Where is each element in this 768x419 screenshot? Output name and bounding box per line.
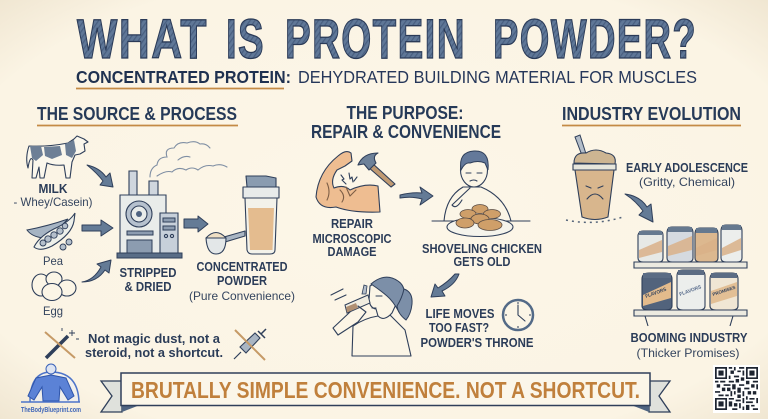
icon: pea pod (27, 213, 75, 250)
label: early adolescence (626, 161, 748, 189)
label: stripped and dried (120, 266, 176, 294)
label: pea: Pea (43, 254, 63, 268)
icon: shaker bottle (243, 176, 279, 254)
logo: the body blueprint (21, 364, 81, 414)
label: repair microscopic damage: MICROSCOPIC (312, 232, 392, 246)
heading: the purpose (311, 103, 501, 142)
icon: man eating chicken (432, 151, 530, 236)
heading: industry evolution: INDUSTRY EVOLUTION (562, 104, 741, 124)
icon: hammer (358, 153, 395, 187)
icon: crossed-out magic wand (45, 328, 79, 358)
label: milk: - Whey/Casein) (14, 195, 93, 209)
title: PROTEIN (285, 7, 466, 70)
panel: industry evolution (562, 104, 748, 360)
label: shoveling chicken gets old: SHOVELING CHICKEN (422, 242, 542, 256)
title (77, 7, 697, 70)
panel: the source and process (14, 104, 295, 360)
arrow: repair to chicken (400, 187, 433, 205)
heading: the purpose: REPAIR & CONVENIENCE (311, 122, 501, 142)
label: shoveling chicken gets old (422, 242, 542, 269)
subtitle (76, 67, 697, 88)
bottom shelf jars (642, 270, 738, 310)
label: concentrated powder: CONCENTRATED (196, 260, 288, 274)
icon: cow (27, 136, 88, 178)
label: concentrated powder: (Pure Convenience) (189, 289, 295, 303)
icon: flexed arm (316, 152, 380, 212)
label: repair microscopic damage: REPAIR (331, 217, 373, 231)
label: concentrated powder: POWDER (217, 274, 267, 288)
icon: sad gritty shake (566, 135, 623, 222)
illustration: shelves of supplement jars (634, 225, 747, 326)
qr code (713, 365, 760, 413)
label: early adolescence: EARLY ADOLESCENCE (626, 161, 748, 175)
panel: the purpose (311, 103, 542, 356)
label: repair microscopic damage (312, 217, 392, 259)
label: life moves too fast: TOO FAST? (429, 321, 489, 335)
icon: processing machine (117, 171, 182, 258)
label: life moves too fast (420, 307, 534, 350)
subtitle: CONCENTRATED PROTEIN: (76, 67, 291, 87)
label: shoveling chicken gets old: GETS OLD (454, 255, 510, 269)
arrow: milk to machine (87, 165, 113, 187)
arrow: egg to machine (82, 260, 111, 282)
label: milk (14, 182, 93, 209)
label: booming industry (630, 331, 748, 360)
subtitle: DEHYDRATED BUILDING MATERIAL FOR MUSCLES (298, 67, 697, 87)
warning text: steroid, not a shortcut. (85, 345, 223, 360)
banner: brutally simple convenience (101, 373, 670, 412)
label: booming industry: (Thicker Promises) (636, 346, 740, 360)
bottom shelf (634, 310, 747, 326)
banner: brutally simple convenience: BRUTALLY SIMPLE CONVENIENCE. NOT A SHORTCUT. (131, 377, 640, 403)
bottom shelf jars: PROMISES (712, 285, 736, 297)
heading: the source and process: THE SOURCE & PROCESS (37, 104, 237, 124)
label: life moves too fast: POWDER'S THRONE (420, 336, 534, 350)
label: egg: Egg (43, 304, 63, 318)
heading: the purpose: THE PURPOSE: (346, 103, 464, 123)
warning text (85, 331, 223, 360)
label: concentrated powder (189, 260, 295, 303)
icon: woman drinking shake (331, 277, 412, 356)
label: repair microscopic damage: DAMAGE (328, 245, 376, 259)
arrow: machine to powder (184, 216, 208, 232)
bottom shelf jars: FLAVORS (645, 287, 668, 300)
arrow: chicken to shake (431, 274, 459, 297)
icon: crossed-out syringe (234, 329, 266, 360)
label: stripped and dried: STRIPPED (120, 266, 176, 280)
icon: smoke (150, 142, 227, 177)
icon: eggs (32, 272, 76, 300)
label: early adolescence: (Gritty, Chemical) (639, 175, 735, 189)
label: booming industry: BOOMING INDUSTRY (630, 331, 748, 345)
arrow: pea to machine (82, 220, 113, 236)
title: WHAT (77, 7, 208, 70)
label: stripped and dried: & DRIED (124, 280, 172, 294)
warning text: Not magic dust, not a (88, 331, 221, 346)
logo: the body blueprint: TheBodyBlueprint.com (21, 407, 81, 414)
label: milk: MILK (38, 182, 68, 196)
icon: clock (503, 300, 533, 330)
top shelf jars (638, 225, 742, 262)
label: life moves too fast: LIFE MOVES (426, 307, 494, 321)
top shelf (634, 262, 747, 268)
title: IS (226, 7, 265, 70)
bottom shelf jars: FLAVORS (679, 284, 703, 298)
icon: scoop of powder (206, 231, 245, 254)
arrow: early to booming (625, 194, 653, 222)
